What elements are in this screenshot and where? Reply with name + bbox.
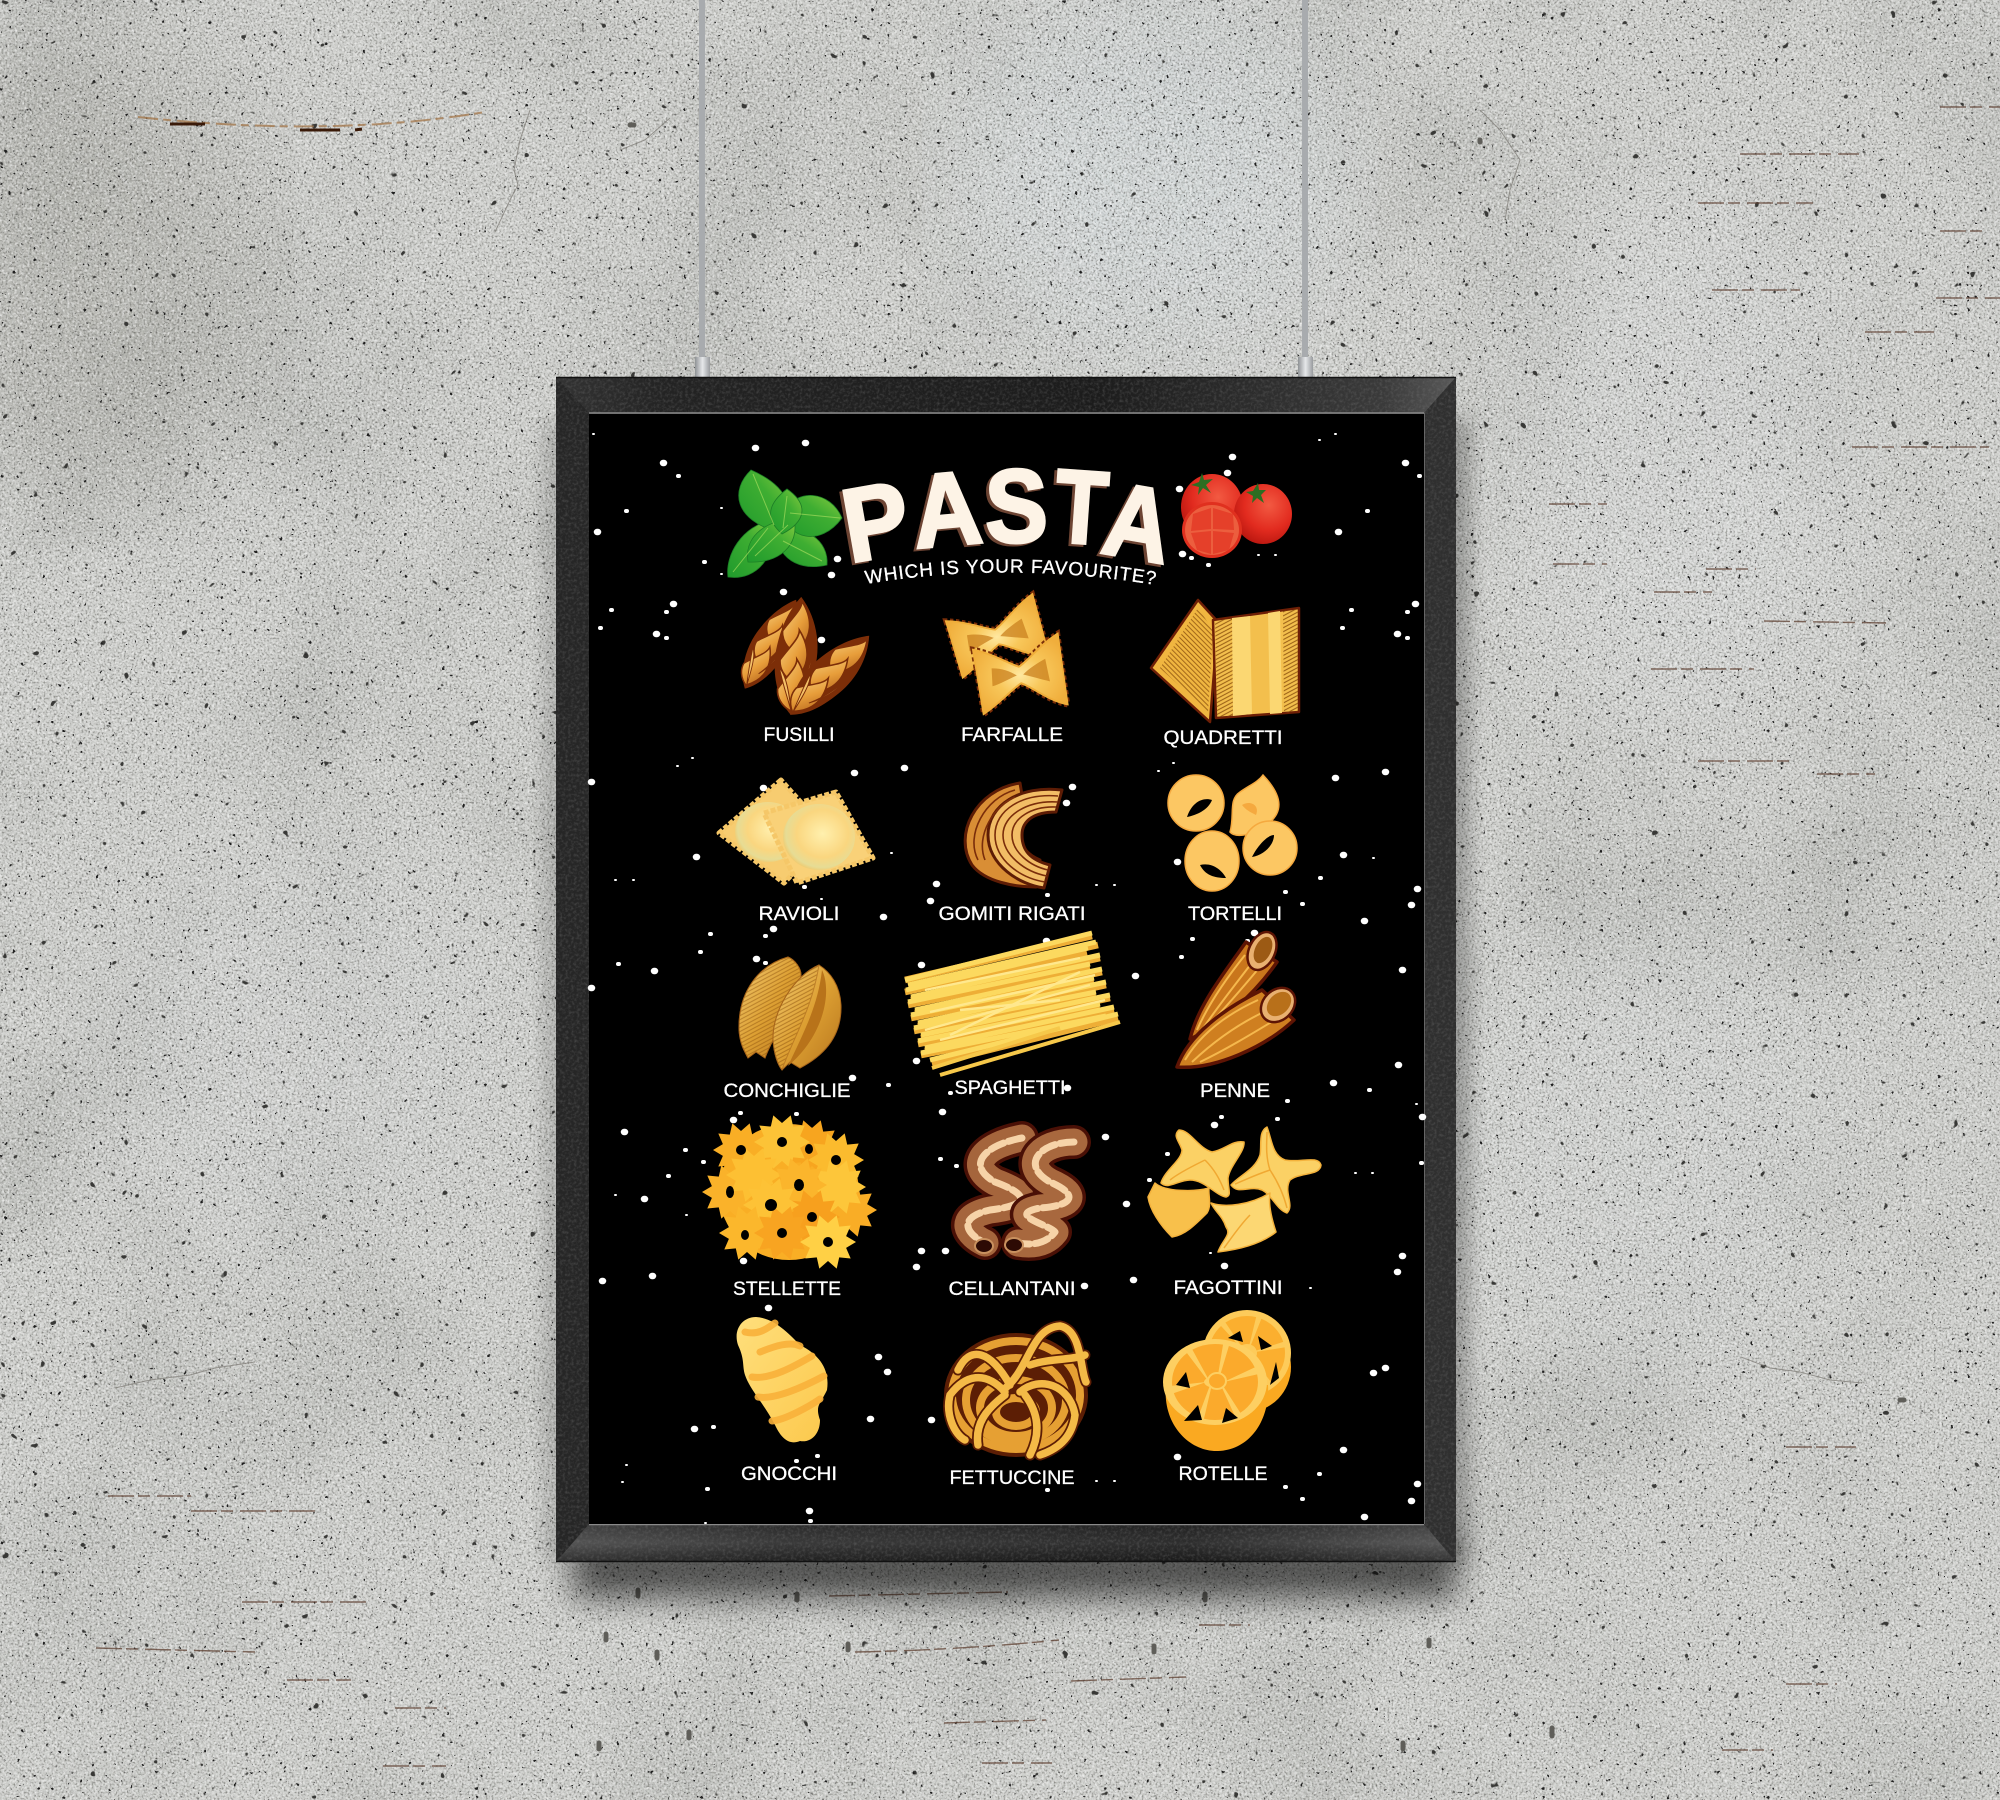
item: tortelli xyxy=(1168,775,1297,925)
star speckles xyxy=(591,434,1423,1523)
item: stellette xyxy=(702,1115,877,1300)
label: SPAGHETTI xyxy=(954,1078,1066,1099)
label: ROTELLE xyxy=(1178,1464,1268,1485)
label: CONCHIGLIE xyxy=(724,1081,850,1102)
label: TORTELLI xyxy=(1188,904,1282,925)
icon: farfalle xyxy=(945,594,1068,716)
icon: rotelle xyxy=(1163,1310,1291,1451)
poster black background xyxy=(589,414,1424,1524)
hanging wire: right xyxy=(1298,0,1313,378)
item: ravioli xyxy=(719,780,873,925)
label: FAGOTTINI xyxy=(1174,1278,1282,1299)
label: GNOCCHI xyxy=(741,1464,837,1485)
icon: ravioli xyxy=(719,780,873,883)
item: fusilli xyxy=(729,591,883,746)
icon: tomatoes xyxy=(1181,473,1292,558)
item: farfalle xyxy=(945,594,1068,746)
label: CELLANTANI xyxy=(948,1279,1076,1300)
icon: fagottini xyxy=(1148,1127,1321,1252)
icon: fusilli xyxy=(729,591,883,729)
icon: conchiglie xyxy=(739,957,841,1070)
item: quadretti xyxy=(1151,600,1299,749)
icon: tortelli xyxy=(1168,775,1297,891)
title: PASTA: P xyxy=(834,460,918,585)
icon: basil leaves xyxy=(728,470,842,577)
item: spaghetti xyxy=(905,933,1120,1099)
title: PASTA: T xyxy=(1051,449,1112,568)
label: FARFALLE xyxy=(961,725,1063,746)
label: QUADRETTI xyxy=(1164,728,1282,749)
label: GOMITI RIGATI xyxy=(938,904,1086,925)
picture frame xyxy=(556,377,1456,1562)
item: fagottini xyxy=(1148,1127,1321,1299)
label: RAVIOLI xyxy=(758,904,840,925)
icon: stellette xyxy=(702,1115,877,1269)
hanging wire: left xyxy=(695,0,710,378)
item: rotelle xyxy=(1163,1310,1291,1485)
item: gnocchi xyxy=(737,1317,837,1485)
item: cellantani xyxy=(948,1138,1076,1300)
label: PENNE xyxy=(1200,1081,1270,1102)
label: FUSILLI xyxy=(764,725,834,746)
poster xyxy=(588,414,1426,1524)
title: PASTA: A xyxy=(1095,459,1181,586)
icon: spaghetti xyxy=(905,933,1120,1075)
icon: gomiti rigati xyxy=(965,783,1062,888)
icon: fettuccine xyxy=(944,1326,1088,1457)
icon: penne xyxy=(1177,927,1302,1067)
icon: quadretti xyxy=(1151,600,1299,722)
label: FETTUCCINE xyxy=(950,1468,1074,1489)
title: PASTA: A xyxy=(908,449,986,571)
item: gomiti rigati xyxy=(938,783,1086,925)
icon: gnocchi xyxy=(737,1317,828,1442)
item: conchiglie xyxy=(724,957,850,1102)
title: PASTA xyxy=(834,448,1181,586)
label: STELLETTE xyxy=(733,1279,841,1300)
icon: cellantani xyxy=(968,1138,1074,1253)
item: penne xyxy=(1177,927,1302,1102)
item: fettuccine xyxy=(944,1326,1088,1489)
title: PASTA: S xyxy=(984,448,1049,566)
subtitle: WHICH IS YOUR FAVOURITE? xyxy=(864,559,1156,584)
frame shadow xyxy=(544,420,1470,1598)
